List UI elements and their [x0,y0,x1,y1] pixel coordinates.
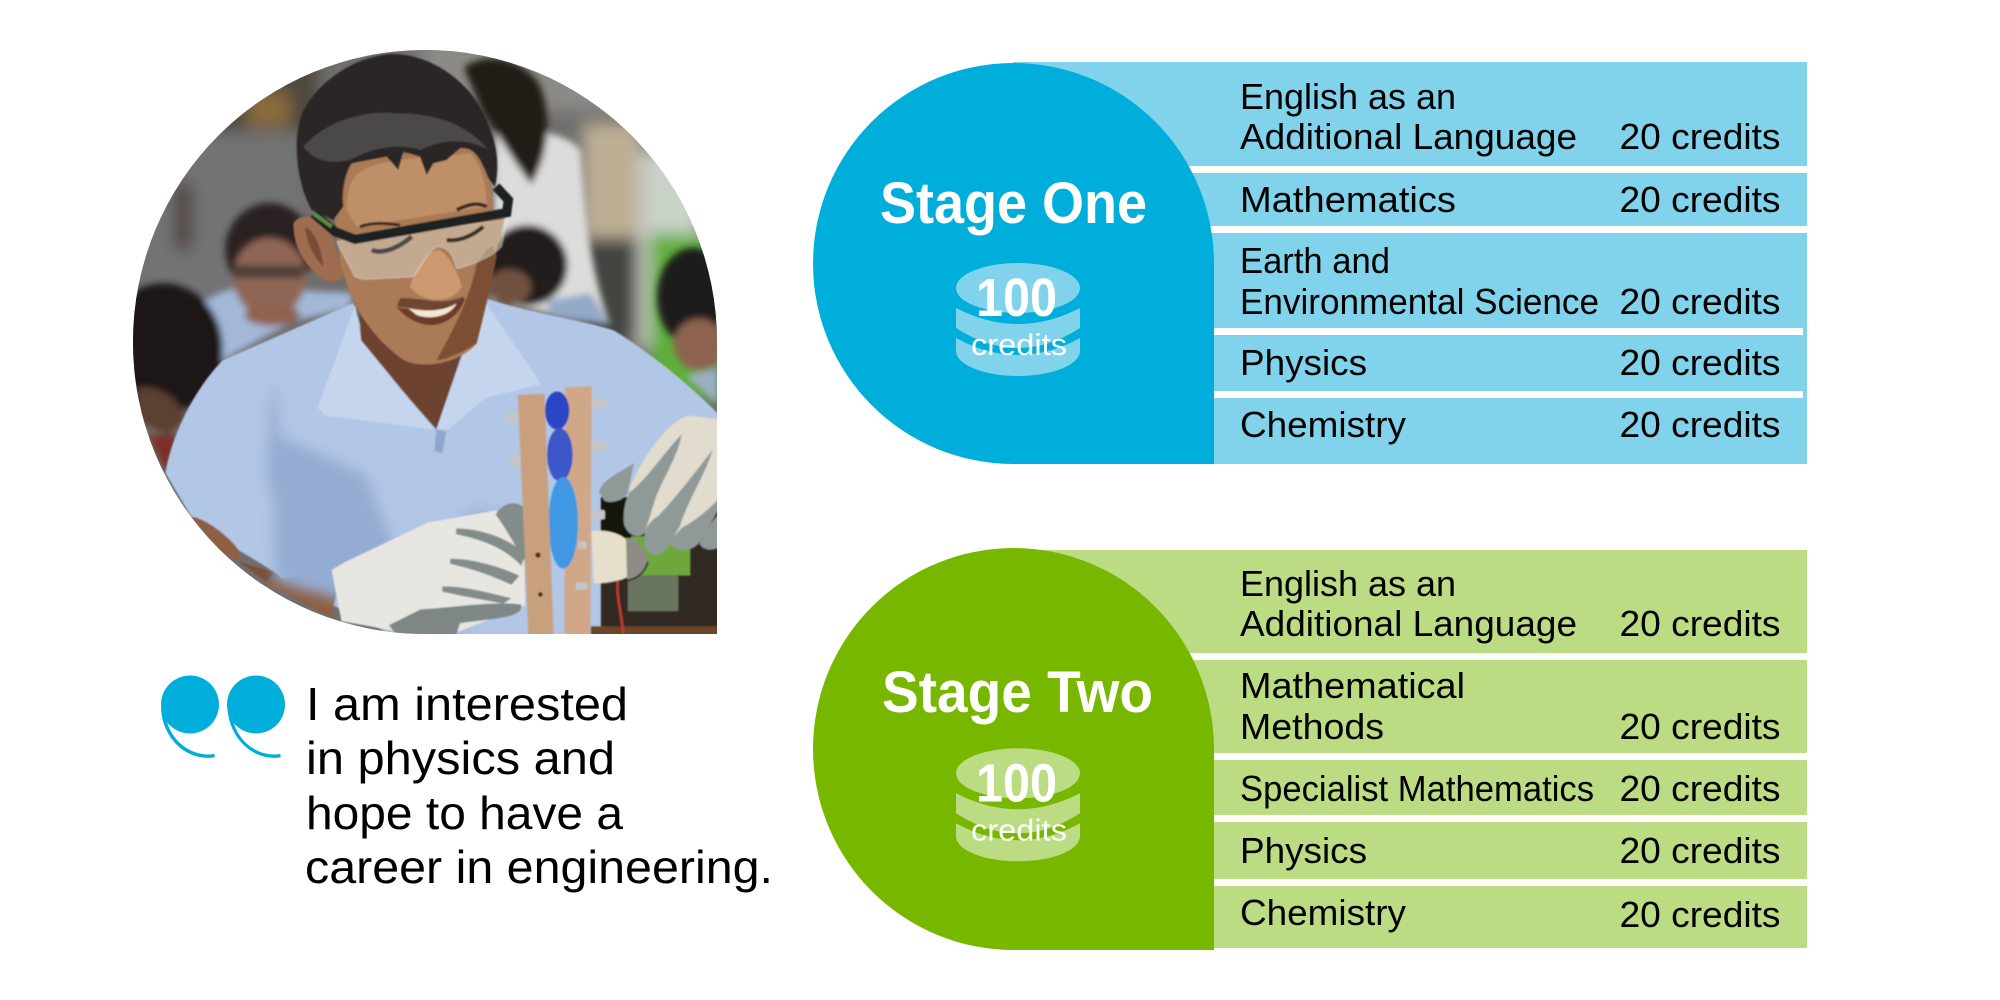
stage two subject rows: 20 credits [1620,768,1780,809]
background student in white [492,131,610,325]
stage one subject rows: 20 credits [1620,404,1780,445]
stage two credit total: 100 [976,754,1057,814]
stage two row dividers [1100,653,1807,886]
neck [358,312,461,429]
stage one subject rows: English as an [1240,76,1456,117]
gear model and right hand [506,386,722,641]
quote text: I am interested [306,678,628,730]
stage two subject rows: 20 credits [1620,603,1780,644]
shirt [164,298,717,634]
right glove [628,416,720,540]
stage two heading: Stage Two [882,660,1153,725]
icon: stage two credit stack [956,748,1080,861]
stage two subject table background [1013,550,1807,948]
stage one subject rows: 20 credits [1620,281,1780,322]
stage one credit total [971,268,1067,362]
stage two subject rows: English as an [1240,563,1456,604]
stage one credit total: 100 [976,268,1057,328]
icon: stage one credit stack [956,263,1080,376]
stage two subject rows: Additional Language [1240,603,1577,644]
stage two subject rows [1240,563,1780,935]
shirt shadows [263,396,493,634]
stage one subject rows: Physics [1240,342,1367,383]
stage one subject rows: Additional Language [1240,116,1577,157]
goggles lens [337,220,507,279]
rods [506,399,608,590]
stage one heading: Stage One [880,171,1147,236]
back stick [565,386,592,640]
photo: student building a gear model [133,50,717,634]
stage one subject table background [1013,62,1807,464]
stage one badge shape [813,63,1214,464]
stage two subject rows: Physics [1240,830,1367,871]
motor [592,531,627,583]
goggles frame [313,187,508,239]
hair [297,54,497,220]
panel: stage one [813,62,1807,464]
stage two subject rows: 20 credits [1620,830,1780,871]
student's head [293,54,508,365]
stage one subject rows: Mathematics [1240,179,1456,220]
stage two subject rows: 20 credits [1620,894,1780,935]
stage one subject rows: Earth and [1240,240,1390,281]
stage two badge shape [813,548,1214,950]
stage two subject rows: Chemistry [1240,892,1406,933]
panel: stage two [813,548,1807,950]
stage two credit total [971,754,1067,848]
stage one subject rows: 20 credits [1620,342,1780,383]
stage one subject rows: 20 credits [1620,179,1780,220]
stage one subject rows: Environmental Science [1240,281,1599,322]
stage two subject rows: 20 credits [1620,706,1780,747]
stage one subject rows: Chemistry [1240,404,1406,445]
stage one subject rows [1240,76,1780,445]
stage one subject rows: 20 credits [1620,116,1780,157]
stage one credit total: credits [971,327,1067,362]
mouth [397,298,465,325]
quote text [305,678,773,893]
back student centre [487,225,568,306]
left blurred student [197,288,353,360]
wires [617,581,624,640]
stage two subject rows: Specialist Mathematics [1240,768,1594,809]
ear [293,217,343,282]
background behind model [600,496,717,628]
quote text: hope to have a [306,787,623,839]
icon: quote marks [161,676,285,758]
stage two credit total: credits [971,812,1067,848]
left foreground head [104,283,223,414]
eyes [372,237,412,251]
nose [410,250,462,300]
collar [318,305,434,429]
stage one row dividers [1100,166,1807,398]
front stick [518,394,554,640]
quote text: in physics and [306,732,615,784]
stage two subject rows: Methods [1240,706,1384,747]
stage two subject rows: Mathematical [1240,665,1465,706]
left glove [332,503,529,635]
gears [545,392,569,430]
brows [360,223,400,227]
quote text: career in engineering. [305,841,773,893]
right blurred student [657,248,730,346]
face [335,148,505,365]
